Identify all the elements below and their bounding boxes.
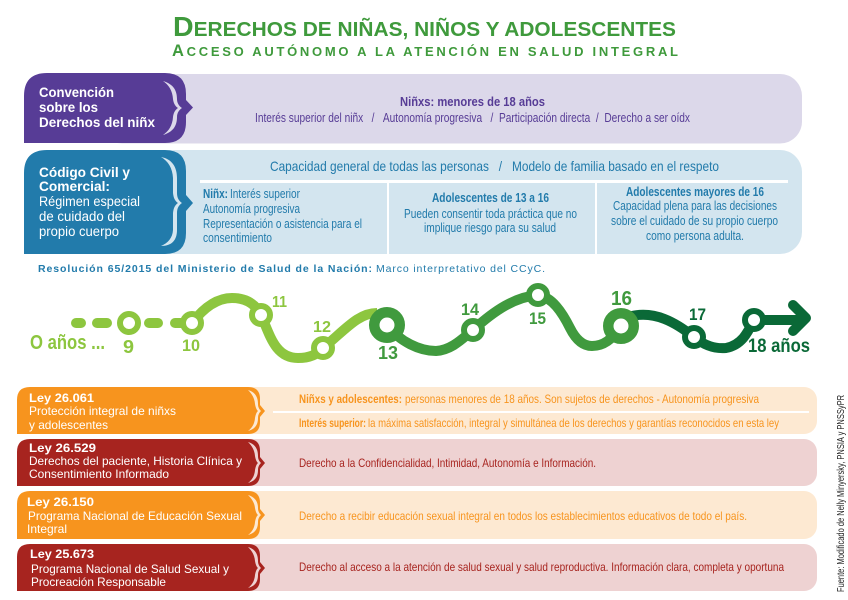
header text: sobre los: [39, 100, 98, 115]
timeline: [30, 286, 810, 363]
age labels: 12: [313, 319, 331, 336]
description: Niñxs y adolescentes:: [299, 392, 402, 406]
subtitle: ACCESO AUTÓNOMO A LA ATENCIÓN EN SALUD INTEGRAL: [172, 42, 678, 60]
column: Adolescentes mayores de 16: [611, 185, 778, 243]
panel text: Niñxs: menores de 18 años: [400, 94, 545, 109]
tab text: Ley 26.529: [29, 441, 96, 455]
panel heading: Capacidad general de todas las personas / Modelo de familia basado en el respeto: [270, 158, 719, 174]
header text: Derechos del niñx: [39, 115, 155, 130]
light green dashes: [76, 318, 185, 328]
resolution note: Resolución 65/2015 del Ministerio de Salud de la Nación:: [38, 263, 372, 275]
age labels: 9: [123, 337, 134, 357]
description: Derecho a la Confidencialidad, Intimidad, Autonomía e Información.: [299, 456, 596, 470]
age labels: 16: [611, 288, 632, 310]
tab text: Programa Nacional de Salud Sexual y: [31, 562, 229, 576]
tab: [17, 491, 265, 539]
age labels: [30, 288, 810, 363]
column: Niñx: Autonomía progresiva: [203, 202, 300, 216]
column: Adolescentes mayores de 16: sobre el cuidado de su propio cuerpo: [611, 214, 778, 228]
tab: [17, 544, 265, 591]
tab text: [27, 495, 242, 536]
panel: Ley 26.150: [17, 491, 817, 539]
column: Adolescentes de 13 a 16: Adolescentes de 13 a 16: [432, 191, 549, 205]
column: Niñx: Niñx:: [203, 187, 228, 201]
header text: de cuidado del: [39, 209, 125, 224]
panel: Ley 25.673: [17, 544, 817, 591]
panel text: [255, 94, 690, 125]
tab text: Derechos del paciente, Historia Clínica y: [29, 454, 242, 468]
tab text: [30, 547, 229, 589]
blue header tab: [24, 150, 193, 254]
column: Adolescentes de 13 a 16: [404, 191, 577, 235]
column: Adolescentes mayores de 16: Adolescentes mayores de 16: [626, 185, 764, 199]
description: Interés superior:: [299, 416, 366, 430]
description: personas menores de 18 años. Son sujetos de derechos - Autonomía progresiva: [405, 392, 759, 406]
arrow head: [793, 305, 806, 331]
column: Adolescentes de 13 a 16: Pueden consentir toda práctica que no: [404, 207, 577, 221]
column: Niñx: Interés superior: [230, 187, 300, 201]
header text: [39, 165, 140, 239]
medium green curve: [387, 295, 621, 351]
tab text: Ley 26.150: [27, 495, 94, 509]
age labels: 14: [461, 300, 480, 319]
panel: Convención: [24, 73, 802, 144]
header text: Convención: [39, 85, 114, 100]
age labels: 15: [529, 309, 546, 328]
resolution note: Marco interpretativo del CCyC.: [376, 263, 545, 275]
title: DERECHOS DE NIÑAS, NIÑOS Y ADOLESCENTES: [173, 11, 676, 42]
panel text: Interés superior del niñx / Autonomía progresiva / Participación directa / Derecho a ser oídx: [255, 110, 690, 125]
age labels: 18 años: [748, 336, 810, 357]
title: [172, 11, 678, 60]
age labels: 11: [272, 294, 287, 311]
resolution note: [38, 263, 545, 275]
column: Niñx: [203, 187, 362, 245]
tab text: Programa Nacional de Educación Sexual: [28, 509, 242, 523]
tab text: Integral: [27, 522, 67, 536]
header text: Código Civil y: [39, 165, 130, 180]
tab text: Ley 25.673: [30, 547, 94, 561]
tab text: [29, 391, 176, 432]
header text: propio cuerpo: [39, 224, 119, 239]
source note: Fuente: Modificado de Nelly Minyersky, PNSIA y PNSSyPR: [836, 395, 847, 592]
age labels: 13: [378, 343, 398, 363]
age labels: 17: [689, 305, 706, 324]
tab text: Procreación Responsable: [31, 575, 166, 589]
tab text: [29, 441, 242, 481]
description: [299, 392, 779, 430]
header text: Comercial:: [39, 179, 110, 194]
tab: [17, 387, 265, 434]
light green curve: [192, 298, 377, 358]
column: Adolescentes de 13 a 16: implique riesgo para su salud: [424, 221, 556, 235]
tab: [17, 439, 265, 486]
age labels: 10: [182, 336, 200, 355]
column: Niñx: consentimiento: [203, 231, 272, 245]
description: Derecho a recibir educación sexual integral en todos los establecimientos educativos de todo el país.: [299, 509, 747, 523]
header text: Régimen especial: [39, 194, 140, 209]
tab text: Consentimiento Informado: [29, 467, 169, 481]
purple header tab: [24, 73, 193, 143]
age labels: O años ...: [30, 332, 105, 354]
dark green curve: [632, 315, 805, 348]
tab text: Ley 26.061: [29, 391, 94, 405]
tab text: Protección integral de niñxs: [29, 404, 176, 418]
column: Adolescentes mayores de 16: Capacidad plena para las decisiones: [613, 199, 777, 213]
tab text: y adolescentes: [29, 418, 108, 432]
nodes: [120, 286, 763, 357]
column: Adolescentes mayores de 16: como persona adulta.: [646, 229, 744, 243]
column: Niñx: Representación o asistencia para el: [203, 217, 362, 231]
header text: [39, 85, 155, 130]
panel: Código Civil y Comercial: [24, 150, 802, 254]
panel: Ley 26.061: [17, 387, 817, 434]
panel: Ley 26.529: [17, 439, 817, 486]
